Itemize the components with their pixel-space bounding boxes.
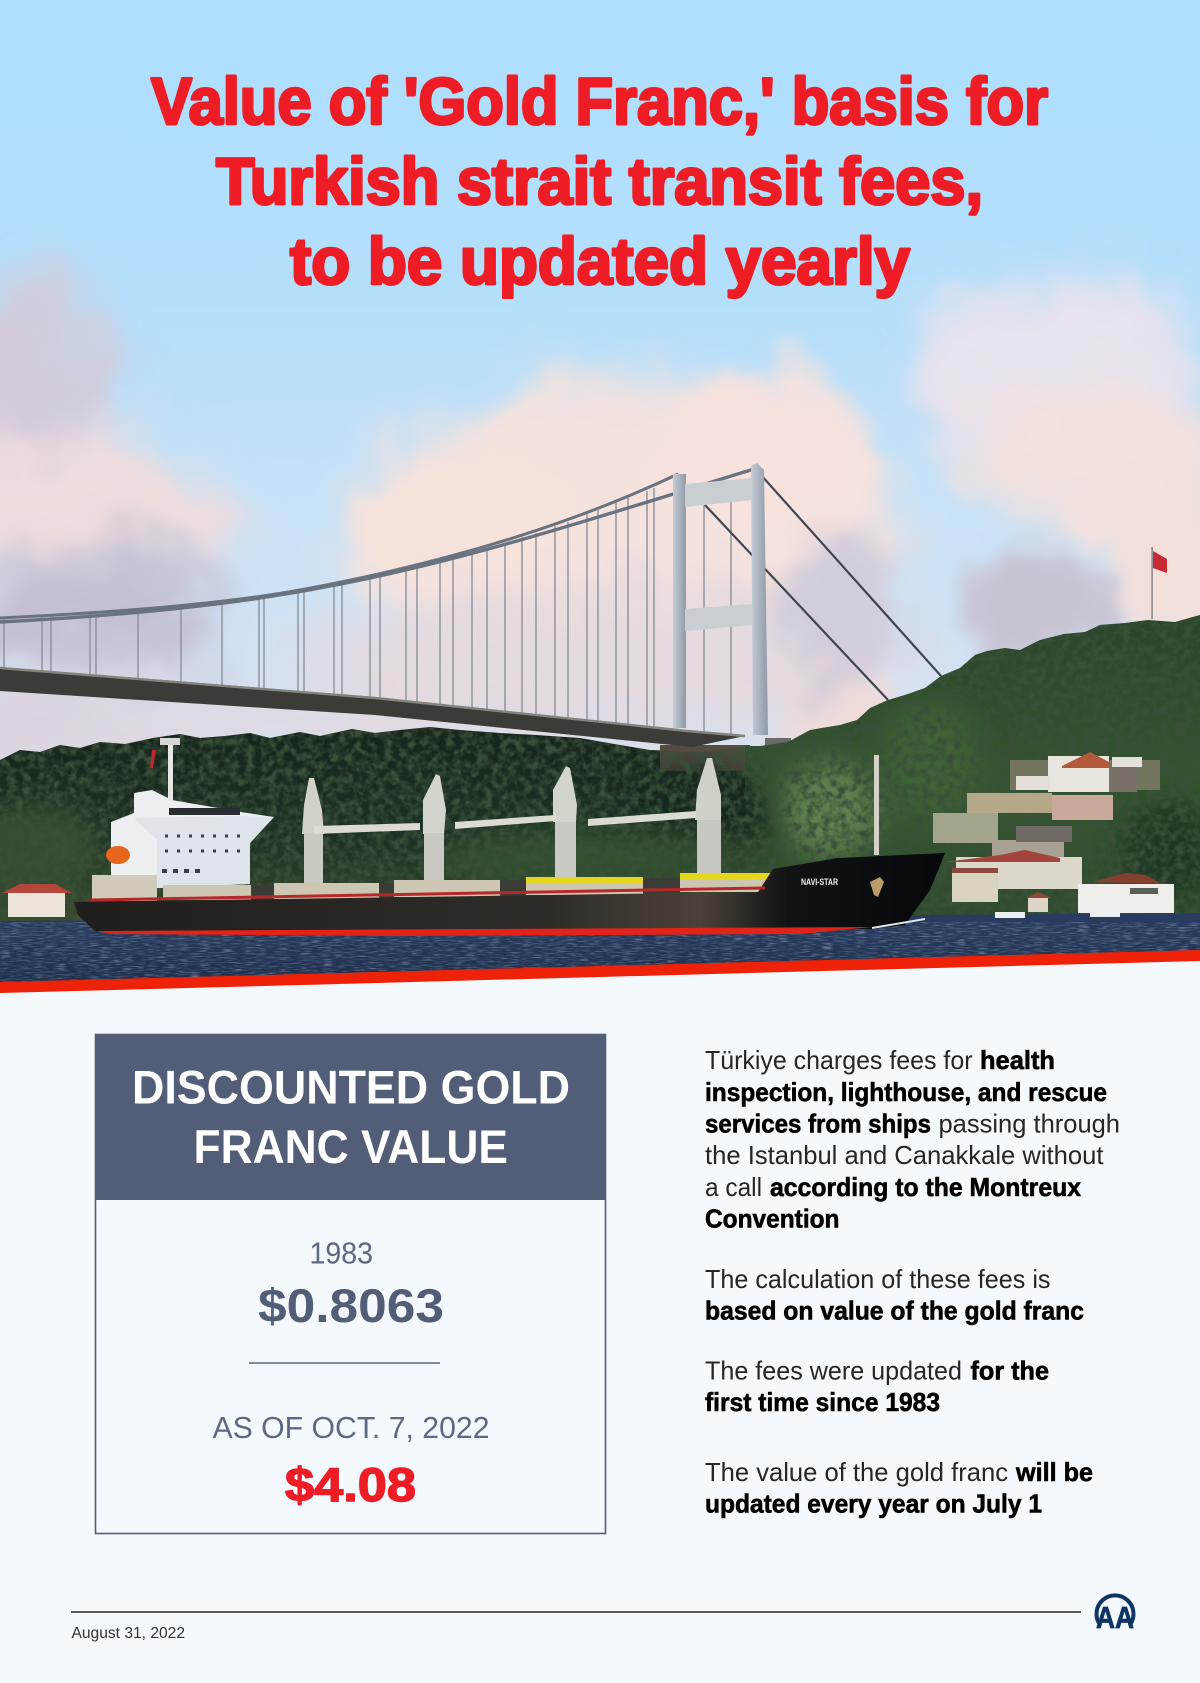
paragraph: first update bbox=[705, 1356, 1049, 1417]
waterfront buildings bbox=[2, 752, 1174, 917]
photo: Bosphorus bridge and bulk carrier bbox=[0, 0, 1200, 1000]
bridge hangers bbox=[4, 480, 731, 735]
paragraph: fee services: Türkiye charges fees for bbox=[705, 1045, 973, 1075]
bridge main cables bbox=[0, 469, 754, 622]
ship superstructure bbox=[92, 738, 274, 901]
panel outline bbox=[96, 1034, 606, 1534]
bridge backstay cables bbox=[705, 475, 941, 700]
text block: fees explanation bbox=[705, 1045, 1120, 1518]
deck top rail bbox=[0, 668, 745, 736]
footer rule bbox=[71, 1611, 1081, 1613]
icon: Anadolu Agency logo: AA bbox=[1096, 1600, 1134, 1635]
forest tones bbox=[0, 610, 1200, 930]
title: Value of 'Gold Franc,' basis for bbox=[151, 64, 1048, 138]
ship bow wave bbox=[872, 919, 925, 928]
panel heading bbox=[132, 1060, 570, 1173]
ship red boot topping bbox=[96, 927, 872, 936]
clouds bbox=[0, 275, 1200, 770]
tower cross beams bbox=[685, 478, 752, 631]
paragraph: yearly update: will be bbox=[1015, 1457, 1093, 1487]
footer date: August 31, 2022 bbox=[72, 1625, 185, 1642]
ship name: NAVI-STAR bbox=[801, 877, 838, 887]
ship hull bbox=[74, 853, 945, 932]
paragraph: yearly update: updated every year on July 1 bbox=[705, 1488, 1042, 1518]
paragraph: fee services: inspection, lighthouse, and rescue bbox=[705, 1077, 1107, 1107]
shoreline boats bbox=[995, 912, 1120, 918]
icon: Turkish flag on hill bbox=[1151, 547, 1167, 619]
panel header bbox=[95, 1034, 606, 1200]
value 1983: $0.8063 bbox=[258, 1279, 444, 1332]
paragraph: yearly update bbox=[705, 1457, 1093, 1518]
title bbox=[151, 64, 1048, 298]
ship emblem bbox=[870, 877, 884, 897]
paragraph: fee services: a call bbox=[705, 1172, 762, 1202]
sky bbox=[0, 0, 1200, 760]
bridge deck bbox=[0, 667, 745, 747]
paragraph: fee services: health bbox=[980, 1045, 1055, 1075]
paragraph: calculation: The calculation of these fees is bbox=[705, 1264, 1050, 1294]
paragraph: calculation: based on value of the gold franc bbox=[705, 1296, 1084, 1326]
value 2022: $4.08 bbox=[285, 1458, 416, 1511]
paragraph: fee services: services from ships bbox=[705, 1108, 931, 1138]
paragraph: yearly update: The value of the gold franc bbox=[705, 1457, 1008, 1487]
year 1983: 1983 bbox=[310, 1236, 373, 1270]
paragraph: first update: first time since 1983 bbox=[705, 1387, 940, 1417]
bridge pier bbox=[660, 738, 791, 772]
date label: AS OF OCT. 7, 2022 bbox=[212, 1410, 490, 1445]
paragraph: fee services: the Istanbul and Canakkale without bbox=[705, 1140, 1104, 1170]
bridge tower near bbox=[673, 474, 686, 728]
divider bbox=[249, 1362, 440, 1364]
ship bbox=[74, 738, 945, 936]
forest: right hillside bbox=[745, 615, 1200, 925]
ship deck rail bbox=[90, 888, 765, 900]
paragraph: fee services: Convention bbox=[705, 1204, 840, 1234]
ship foremast bbox=[874, 755, 879, 855]
ship cranes bbox=[302, 758, 721, 883]
paragraph: fee services bbox=[705, 1045, 1120, 1234]
paragraph: fee services: passing through bbox=[938, 1108, 1120, 1138]
panel: discounted gold franc value bbox=[95, 1034, 606, 1534]
title: to be updated yearly bbox=[290, 224, 910, 298]
paragraph: fee services: according to the Montreux bbox=[770, 1172, 1082, 1202]
water ripples bbox=[0, 922, 1200, 982]
ship crane jibs bbox=[314, 811, 696, 834]
panel heading: DISCOUNTED GOLD bbox=[132, 1060, 570, 1114]
paragraph: first update: for the bbox=[970, 1356, 1049, 1386]
paragraph: first update: The fees were updated bbox=[705, 1356, 962, 1386]
title: Turkish strait transit fees, bbox=[216, 144, 983, 218]
forest: left hillside bbox=[0, 727, 800, 925]
panel heading: FRANC VALUE bbox=[194, 1120, 508, 1173]
paragraph: calculation bbox=[705, 1264, 1084, 1326]
bridge tower far bbox=[751, 463, 768, 735]
red diagonal band bbox=[0, 950, 1200, 993]
water bbox=[0, 913, 1200, 982]
ship hatches bbox=[163, 873, 771, 900]
